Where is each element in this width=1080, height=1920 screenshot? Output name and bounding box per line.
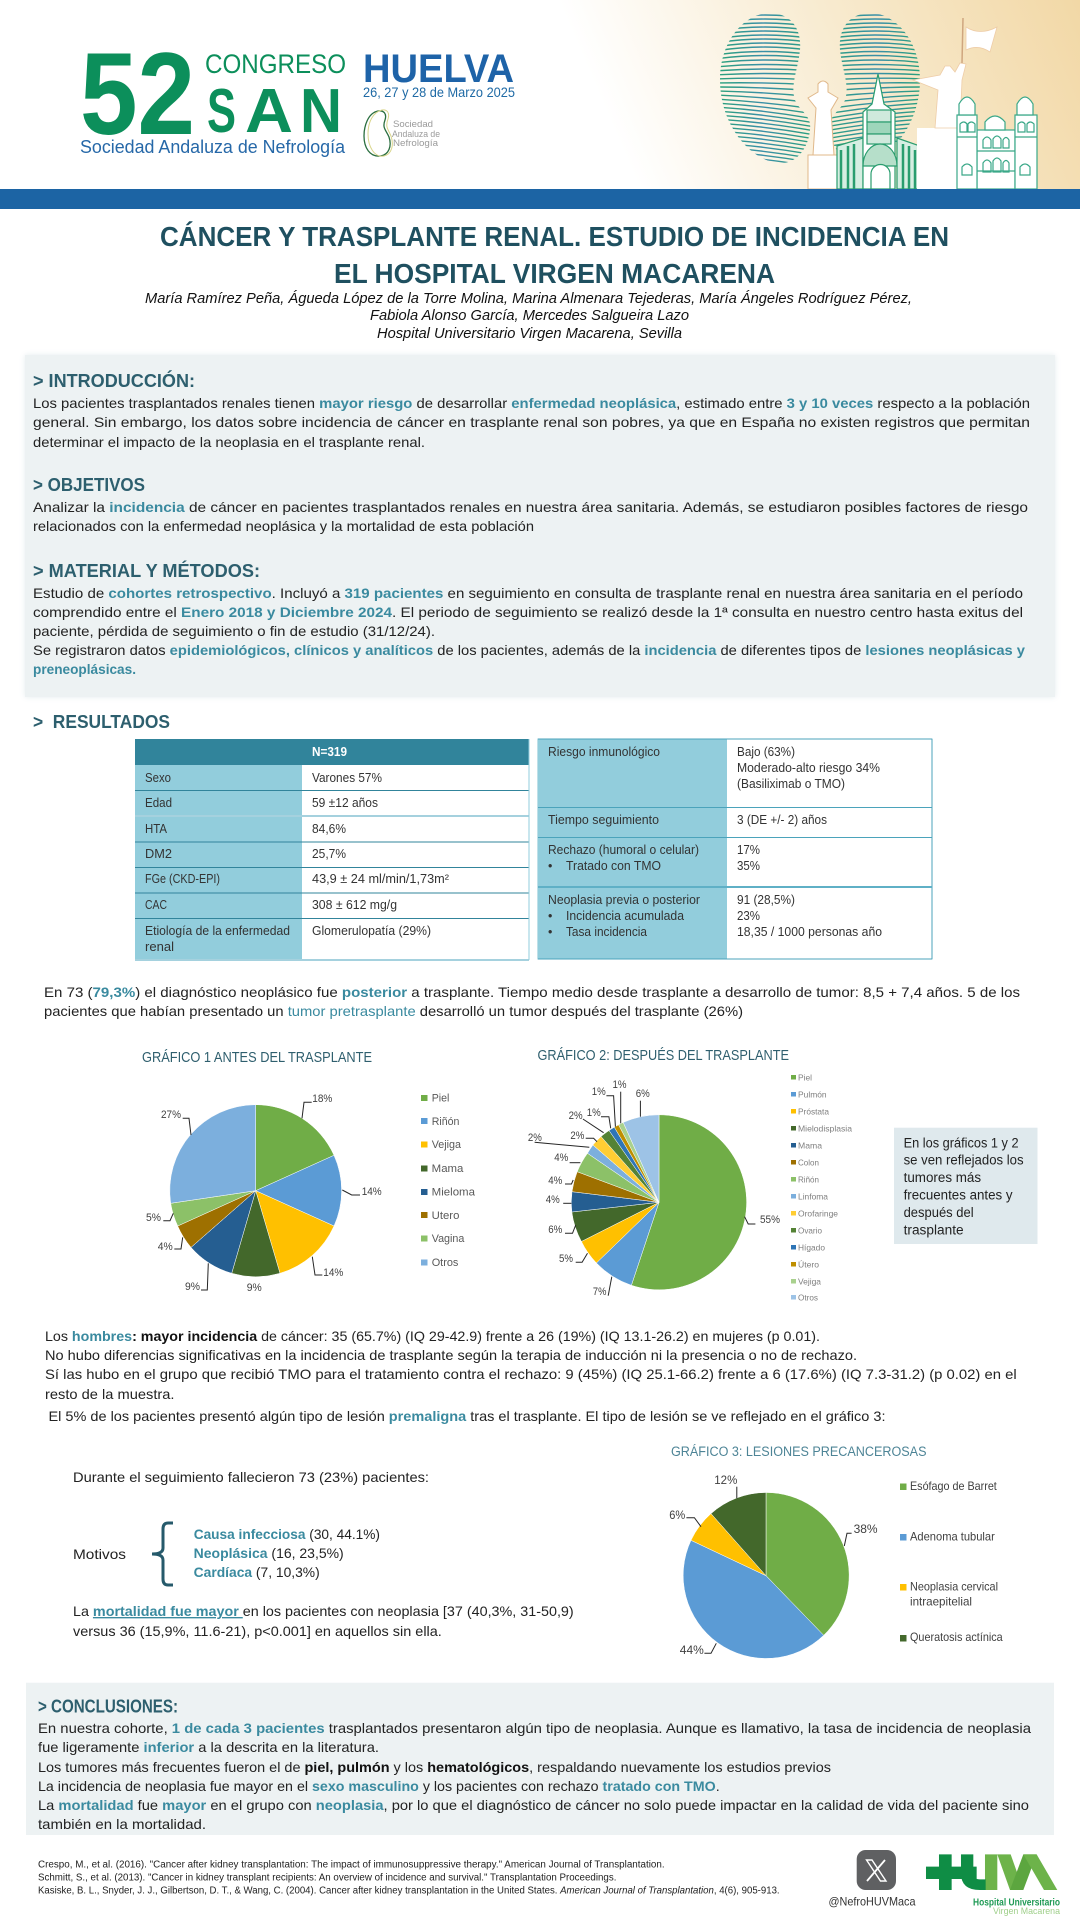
table: immunological risk and neoplasia: Incidencia acumulada	[566, 909, 684, 923]
percentages: 14%	[323, 1267, 343, 1279]
causes of death: Cardíaca (7, 10,3%)	[194, 1565, 320, 1580]
congress logo	[80, 28, 346, 159]
authors: Hospital Universitario Virgen Macarena, Sevilla	[377, 325, 682, 342]
text: conclusiones: La mortalidad fue mayor en el grupo con neoplasia , por lo que el diagnóstico de cáncer no solo puede impactar en la calidad de vida del paciente sino	[38, 1798, 1029, 1813]
table: immunological risk and neoplasia: Tiempo seguimiento	[548, 813, 659, 827]
legend: Colon	[798, 1157, 819, 1167]
chart title: GRÁFICO 1 ANTES DEL TRASPLANTE	[142, 1049, 372, 1066]
percentages: 9%	[185, 1281, 200, 1293]
callout: charts 1 and 2 note: trasplante	[904, 1222, 964, 1237]
heading: material y métodos: > MATERIAL Y MÉTODOS:	[33, 560, 260, 581]
causes of death: Causa infecciosa (30, 44.1%)	[194, 1527, 380, 1542]
logo mark	[926, 1854, 1057, 1890]
congress logo: CONGRESO	[205, 49, 346, 79]
conquistador statue with flag	[913, 18, 997, 189]
chart title: GRÁFICO 2: DESPUÉS DEL TRASPLANTE	[538, 1047, 789, 1064]
percentages: 5%	[146, 1212, 161, 1224]
icon: striped kidneys	[715, 11, 925, 171]
heading: resultados: > RESULTADOS	[33, 712, 170, 732]
percentages: 27%	[161, 1109, 181, 1121]
heading: conclusiones: > CONCLUSIONES:	[38, 1696, 178, 1716]
text: introducción: Los pacientes trasplantados renales tienen mayor riesgo de desarrollar enfermedad neoplásica , estimado entre 3 y 10 veces respecto a la población	[33, 396, 1030, 411]
legend: Linfoma	[798, 1191, 828, 1201]
legend: Útero	[798, 1259, 819, 1269]
text: incidence by sex and treatment: Los hombres: mayor incidencia de cáncer: 35 (65.7%) (IQ 29-42.9) frente a 26 (19%) (IQ 13.1-26.2) en mujeres (p 0.01).	[45, 1329, 820, 1344]
pie	[170, 1105, 342, 1277]
table: patient characteristics: Varones 57%	[312, 771, 382, 785]
text: introducción: determinar el impacto de la neoplasia en el trasplante renal.	[33, 435, 425, 450]
legend	[900, 1479, 1003, 1644]
causes of death: Neoplásica (16, 23,5%)	[194, 1546, 344, 1561]
chart 1: tumours before transplant	[142, 1049, 476, 1294]
references: Kasiske, B. L., Snyder, J. J., Gilbertson, D. T., & Wang, C. (2004). Cancer after kidney transplantation in the United States. American Journal of Transplantation, 4(6), 905-913.	[38, 1885, 780, 1896]
legend	[421, 1093, 476, 1269]
percentages: 7%	[593, 1286, 607, 1298]
logo: Hospital Universitario Virgen Macarena: Virgen Macarena	[993, 1906, 1061, 1917]
percentages: 6%	[548, 1224, 562, 1236]
social handle: @NefroHUVMaca	[828, 1895, 916, 1909]
table: immunological risk and neoplasia	[538, 739, 932, 959]
text: conclusiones: Los tumores más frecuentes fueron el de piel, pulmón y los hematológicos , respaldando nuevamente los estudios previos	[38, 1760, 831, 1775]
legend: Orofaringe	[798, 1208, 838, 1218]
table: patient characteristics: FGe (CKD-EPI)	[145, 872, 220, 886]
legend: Piel	[432, 1093, 449, 1105]
table: immunological risk and neoplasia: •	[548, 859, 552, 873]
text: material y métodos: comprendido entre el Enero 2018 y Diciembre 2024 . El periodo de seguimiento se realizó desde la 1ª consulta en nuestro centro hasta exitus del	[33, 605, 1023, 620]
congress place and date: 26, 27 y 28 de Marzo 2025	[363, 84, 515, 100]
society kidney logo	[364, 110, 440, 156]
text: incidence by sex and treatment: resto de la muestra.	[45, 1387, 174, 1402]
congress logo: A	[245, 77, 293, 146]
legend: Mielodisplasia	[798, 1123, 852, 1133]
panel: introduction, objectives, methods	[25, 355, 1055, 697]
percentages: 18%	[312, 1093, 332, 1105]
right church	[957, 97, 1037, 189]
text: introducción	[33, 396, 1030, 450]
legend: Riñón	[432, 1116, 459, 1128]
percentages: 38%	[854, 1522, 878, 1536]
table: patient characteristics: 84,6%	[312, 822, 346, 836]
percentages: 1%	[587, 1107, 601, 1119]
text: material y métodos: paciente, pérdida de seguimiento o fin de estudio (31/12/24).	[33, 624, 435, 639]
table: immunological risk and neoplasia: •	[548, 925, 552, 939]
text: material y métodos	[33, 586, 1025, 677]
table: patient characteristics: Sexo	[145, 771, 171, 785]
text: incidence by sex and treatment: El 5% de los pacientes presentó algún tipo de lesión premaligna tras el trasplante. El tipo de lesión se ve reflejado en el gráfico 3:	[48, 1409, 886, 1424]
authors	[145, 290, 912, 342]
percentages: 44%	[680, 1643, 704, 1657]
references	[38, 1859, 780, 1896]
text: material y métodos: Estudio de cohortes retrospectivo . Incluyó a 319 pacientes en seguimiento en consulta de trasplante renal en nuestra área sanitaria en el período	[33, 586, 1023, 601]
legend: Queratosis actínica	[910, 1630, 1003, 1644]
icon: X social logo	[857, 1850, 896, 1890]
blue band	[0, 189, 1080, 209]
legend: Pulmón	[798, 1089, 827, 1099]
legend: Adenoma tubular	[910, 1530, 995, 1544]
icon: brace	[152, 1523, 173, 1585]
text: diagnosis timing: En 73 ( 79,3% ) el diagnóstico neoplásico fue posterior a trasplante. Tiempo medio desde trasplante a desarrollo de tumor: 8,5 + 7,4 años. 5 de los	[44, 985, 1020, 1000]
text: objetivos: relacionados con la enfermedad neoplásica y la mortalidad de esta población	[33, 519, 534, 534]
table: immunological risk and neoplasia: 3 (DE +/- 2) años	[737, 813, 827, 827]
table: patient characteristics: Etiología de la enfermedad	[145, 924, 290, 938]
text: mortality during follow-up: Motivos	[73, 1547, 126, 1562]
table: immunological risk and neoplasia: Tratado con TMO	[566, 859, 661, 873]
text: conclusiones	[38, 1721, 1031, 1832]
table: patient characteristics: 59 ±12 años	[312, 796, 378, 810]
table: immunological risk and neoplasia: •	[548, 909, 552, 923]
percentages: 1%	[612, 1079, 627, 1091]
table: immunological risk and neoplasia: Riesgo inmunológico	[548, 745, 660, 759]
legend: Mama	[432, 1163, 464, 1175]
text: material y métodos: Se registraron datos epidemiológicos, clínicos y analíticos de los pacientes, además de la incidencia de diferentes tipos de lesiones neoplásicas y	[33, 643, 1025, 658]
table: immunological risk and neoplasia: Neoplasia previa o posterior	[548, 893, 700, 907]
heading: objetivos: > OBJETIVOS	[33, 475, 145, 495]
table: immunological risk and neoplasia: 35%	[737, 859, 760, 873]
legend: Vejiga	[432, 1139, 462, 1151]
authors: Fabiola Alonso García, Mercedes Salgueira Lazo	[370, 307, 689, 324]
table: patient characteristics: N=319	[312, 745, 347, 759]
percentages: 6%	[636, 1088, 650, 1100]
percentages	[528, 1079, 780, 1298]
table: immunological risk and neoplasia: 23%	[737, 909, 760, 923]
legend: Otros	[432, 1257, 459, 1269]
leader lines	[163, 1102, 360, 1290]
pie	[571, 1115, 747, 1290]
center church	[837, 74, 920, 189]
causes of death	[194, 1527, 380, 1580]
text: introducción: general. Sin embargo, los datos sobre incidencia de cáncer en trasplante renal son pobres, ya que en España no existen registros que permitan	[33, 415, 1030, 430]
legend: Hígado	[798, 1242, 825, 1252]
legend: intraepitelial	[910, 1594, 972, 1608]
text: mortality during follow-up: La mortalidad fue mayor en los pacientes con neoplasia [37 (40,3%, 31-50,9)	[73, 1604, 574, 1619]
legend: Otros	[798, 1292, 818, 1302]
references: Crespo, M., et al. (2016). "Cancer after kidney transplantation: The impact of immunosuppressive therapy." American Journal of Transplantation.	[38, 1859, 665, 1870]
legend: Piel	[798, 1072, 812, 1082]
percentages: 4%	[158, 1241, 173, 1253]
table: immunological risk and neoplasia: Rechazo (humoral o celular)	[548, 843, 699, 857]
legend	[791, 1072, 852, 1302]
callout: charts 1 and 2 note: frecuentes antes y	[904, 1188, 1013, 1202]
left statue	[808, 81, 838, 189]
text: material y métodos: preneoplásicas.	[33, 661, 136, 677]
percentages: 4%	[554, 1152, 568, 1164]
legend: Mieloma	[432, 1186, 476, 1198]
text: conclusiones: En nuestra cohorte, 1 de cada 3 pacientes trasplantados presentaron algún tipo de neoplasia. Aunque es llamativo, la tasa de incidencia de neoplasia	[38, 1721, 1031, 1736]
callout: charts 1 and 2 note: se ven reflejados los	[904, 1152, 1024, 1168]
percentages: 5%	[559, 1253, 573, 1265]
title: CÁNCER Y TRASPLANTE RENAL. ESTUDIO DE INCIDENCIA EN	[160, 221, 949, 252]
callout: charts 1 and 2 note: En los gráficos 1 y 2	[904, 1135, 1019, 1150]
table: patient characteristics: 25,7%	[312, 847, 346, 861]
text: conclusiones: fue ligeramente inferior a la descrita en la literatura.	[38, 1740, 379, 1755]
table: immunological risk and neoplasia: Bajo (63%)	[737, 745, 795, 759]
references: Schmitt, S., et al. (2013). "Cancer in kidney transplant recipients: An overview of incidence and survival." Transplantation Proceedings.	[38, 1872, 616, 1883]
text: objetivos: Analizar la incidencia de cáncer en pacientes trasplantados renales en nuestra área sanitaria. Además, se estudiaron posibles factores de riesgo	[33, 500, 1028, 515]
authors: María Ramírez Peña, Águeda López de la Torre Molina, Marina Almenara Tejederas, María Ángeles Rodríguez Pérez,	[145, 290, 912, 307]
percentages: 6%	[669, 1508, 686, 1522]
leader lines	[535, 1092, 755, 1296]
text: conclusiones: La incidencia de neoplasia fue mayor en el sexo masculino y los pacientes con rechazo tratado con TMO .	[38, 1779, 720, 1794]
legend: Vejiga	[798, 1276, 821, 1286]
title: EL HOSPITAL VIRGEN MACARENA	[334, 258, 775, 289]
leader lines	[686, 1487, 852, 1653]
percentages: 2%	[570, 1130, 585, 1142]
percentages: 14%	[362, 1186, 382, 1198]
legend: Vagina	[432, 1233, 465, 1245]
society kidney logo: Sociedad	[393, 119, 433, 130]
percentages: 2%	[569, 1110, 583, 1122]
percentages: 12%	[714, 1473, 738, 1487]
percentages: 4%	[548, 1175, 562, 1187]
society kidney logo: Andaluza de	[392, 129, 440, 140]
table: immunological risk and neoplasia: 91 (28,5%)	[737, 893, 795, 907]
congress logo: Sociedad Andaluza de Nefrología	[80, 137, 346, 157]
text: mortality during follow-up: versus 36 (15,9%, 11.6-21), p<0.001] en aquellos sin ella.	[73, 1624, 442, 1639]
table: immunological risk and neoplasia: (Basiliximab o TMO)	[737, 777, 845, 791]
percentages: 9%	[247, 1282, 262, 1294]
text: diagnosis timing: pacientes que habían presentado un tumor pretrasplante desarrolló un tumor después del trasplante (26%)	[44, 1004, 743, 1019]
percentages: 2%	[528, 1132, 542, 1144]
congress logo: N	[300, 77, 342, 146]
table: immunological risk and neoplasia: 18,35 / 1000 personas año	[737, 925, 882, 939]
chart 3: precancerous lesions	[669, 1444, 1003, 1658]
percentages: 1%	[592, 1086, 606, 1098]
panel: conclusions	[26, 1683, 1054, 1835]
pie	[683, 1492, 849, 1658]
table: patient characteristics: DM2	[145, 847, 172, 861]
percentages: 55%	[760, 1214, 780, 1226]
callout: charts 1 and 2 note	[894, 1128, 1038, 1244]
table: immunological risk and neoplasia: Moderado-alto riesgo 34%	[737, 761, 880, 775]
text: objetivos	[33, 500, 1028, 534]
percentages	[146, 1093, 382, 1294]
legend: Esófago de Barret	[910, 1479, 997, 1493]
legend: Próstata	[798, 1106, 829, 1116]
heading: introducción: > INTRODUCCIÓN:	[33, 370, 195, 391]
logo: Hospital Universitario Virgen Macarena: Hospital Universitario	[973, 1898, 1060, 1909]
table: patient characteristics: 43,9 ± 24 ml/min/1,73m²	[312, 872, 449, 886]
text: mortality during follow-up	[73, 1470, 574, 1639]
table: patient characteristics: Glomerulopatía (29%)	[312, 924, 431, 938]
legend: Utero	[432, 1210, 459, 1222]
header background	[0, 0, 1080, 190]
legend: Mama	[798, 1140, 822, 1150]
logo: Hospital Universitario Virgen Macarena	[926, 1854, 1061, 1917]
congress place and date: HUELVA	[363, 47, 514, 91]
legend: Riñón	[798, 1174, 819, 1184]
society kidney logo: Nefrología	[393, 138, 439, 149]
congress logo: S	[207, 77, 236, 146]
text: conclusiones: también en la mortalidad.	[38, 1817, 206, 1832]
legend: Neoplasia cervical	[910, 1580, 998, 1594]
chart title: GRÁFICO 3: LESIONES PRECANCEROSAS	[671, 1444, 926, 1459]
percentages: 4%	[546, 1194, 560, 1206]
callout: charts 1 and 2 note: tumores más	[904, 1170, 981, 1185]
table: immunological risk and neoplasia: Tasa incidencia	[566, 925, 647, 939]
congress logo: 52	[80, 28, 195, 159]
callout: charts 1 and 2 note: después del	[904, 1205, 974, 1220]
table: patient characteristics	[135, 739, 529, 960]
table: patient characteristics: renal	[145, 940, 174, 954]
illustration: Huelva monuments	[808, 18, 1037, 189]
text: incidence by sex and treatment	[45, 1329, 1017, 1424]
table: patient characteristics: Edad	[145, 796, 172, 810]
table: patient characteristics: HTA	[145, 822, 168, 836]
chart 2: tumours after transplant	[528, 1047, 852, 1302]
title	[160, 221, 949, 289]
table: immunological risk and neoplasia: 17%	[737, 843, 760, 857]
table: patient characteristics: CAC	[145, 898, 167, 912]
percentages	[669, 1473, 878, 1657]
legend: Ovario	[798, 1225, 822, 1235]
text: incidence by sex and treatment: Sí las hubo en el grupo que recibió TMO para el tratamiento contra el rechazo: 9 (45%) (IQ 25.1-66.2) frente a 6 (17.6%) (IQ 7.3-31.2) (p 0.02) en el	[45, 1367, 1017, 1382]
table: patient characteristics: 308 ± 612 mg/g	[312, 898, 397, 912]
text: mortality during follow-up: Durante el seguimiento fallecieron 73 (23%) pacientes:	[73, 1470, 429, 1485]
text: diagnosis timing	[44, 985, 1020, 1019]
text: incidence by sex and treatment: No hubo diferencias significativas en la incidencia de trasplante según la terapia de inducción ni la presencia o no de rechazo.	[45, 1348, 857, 1363]
